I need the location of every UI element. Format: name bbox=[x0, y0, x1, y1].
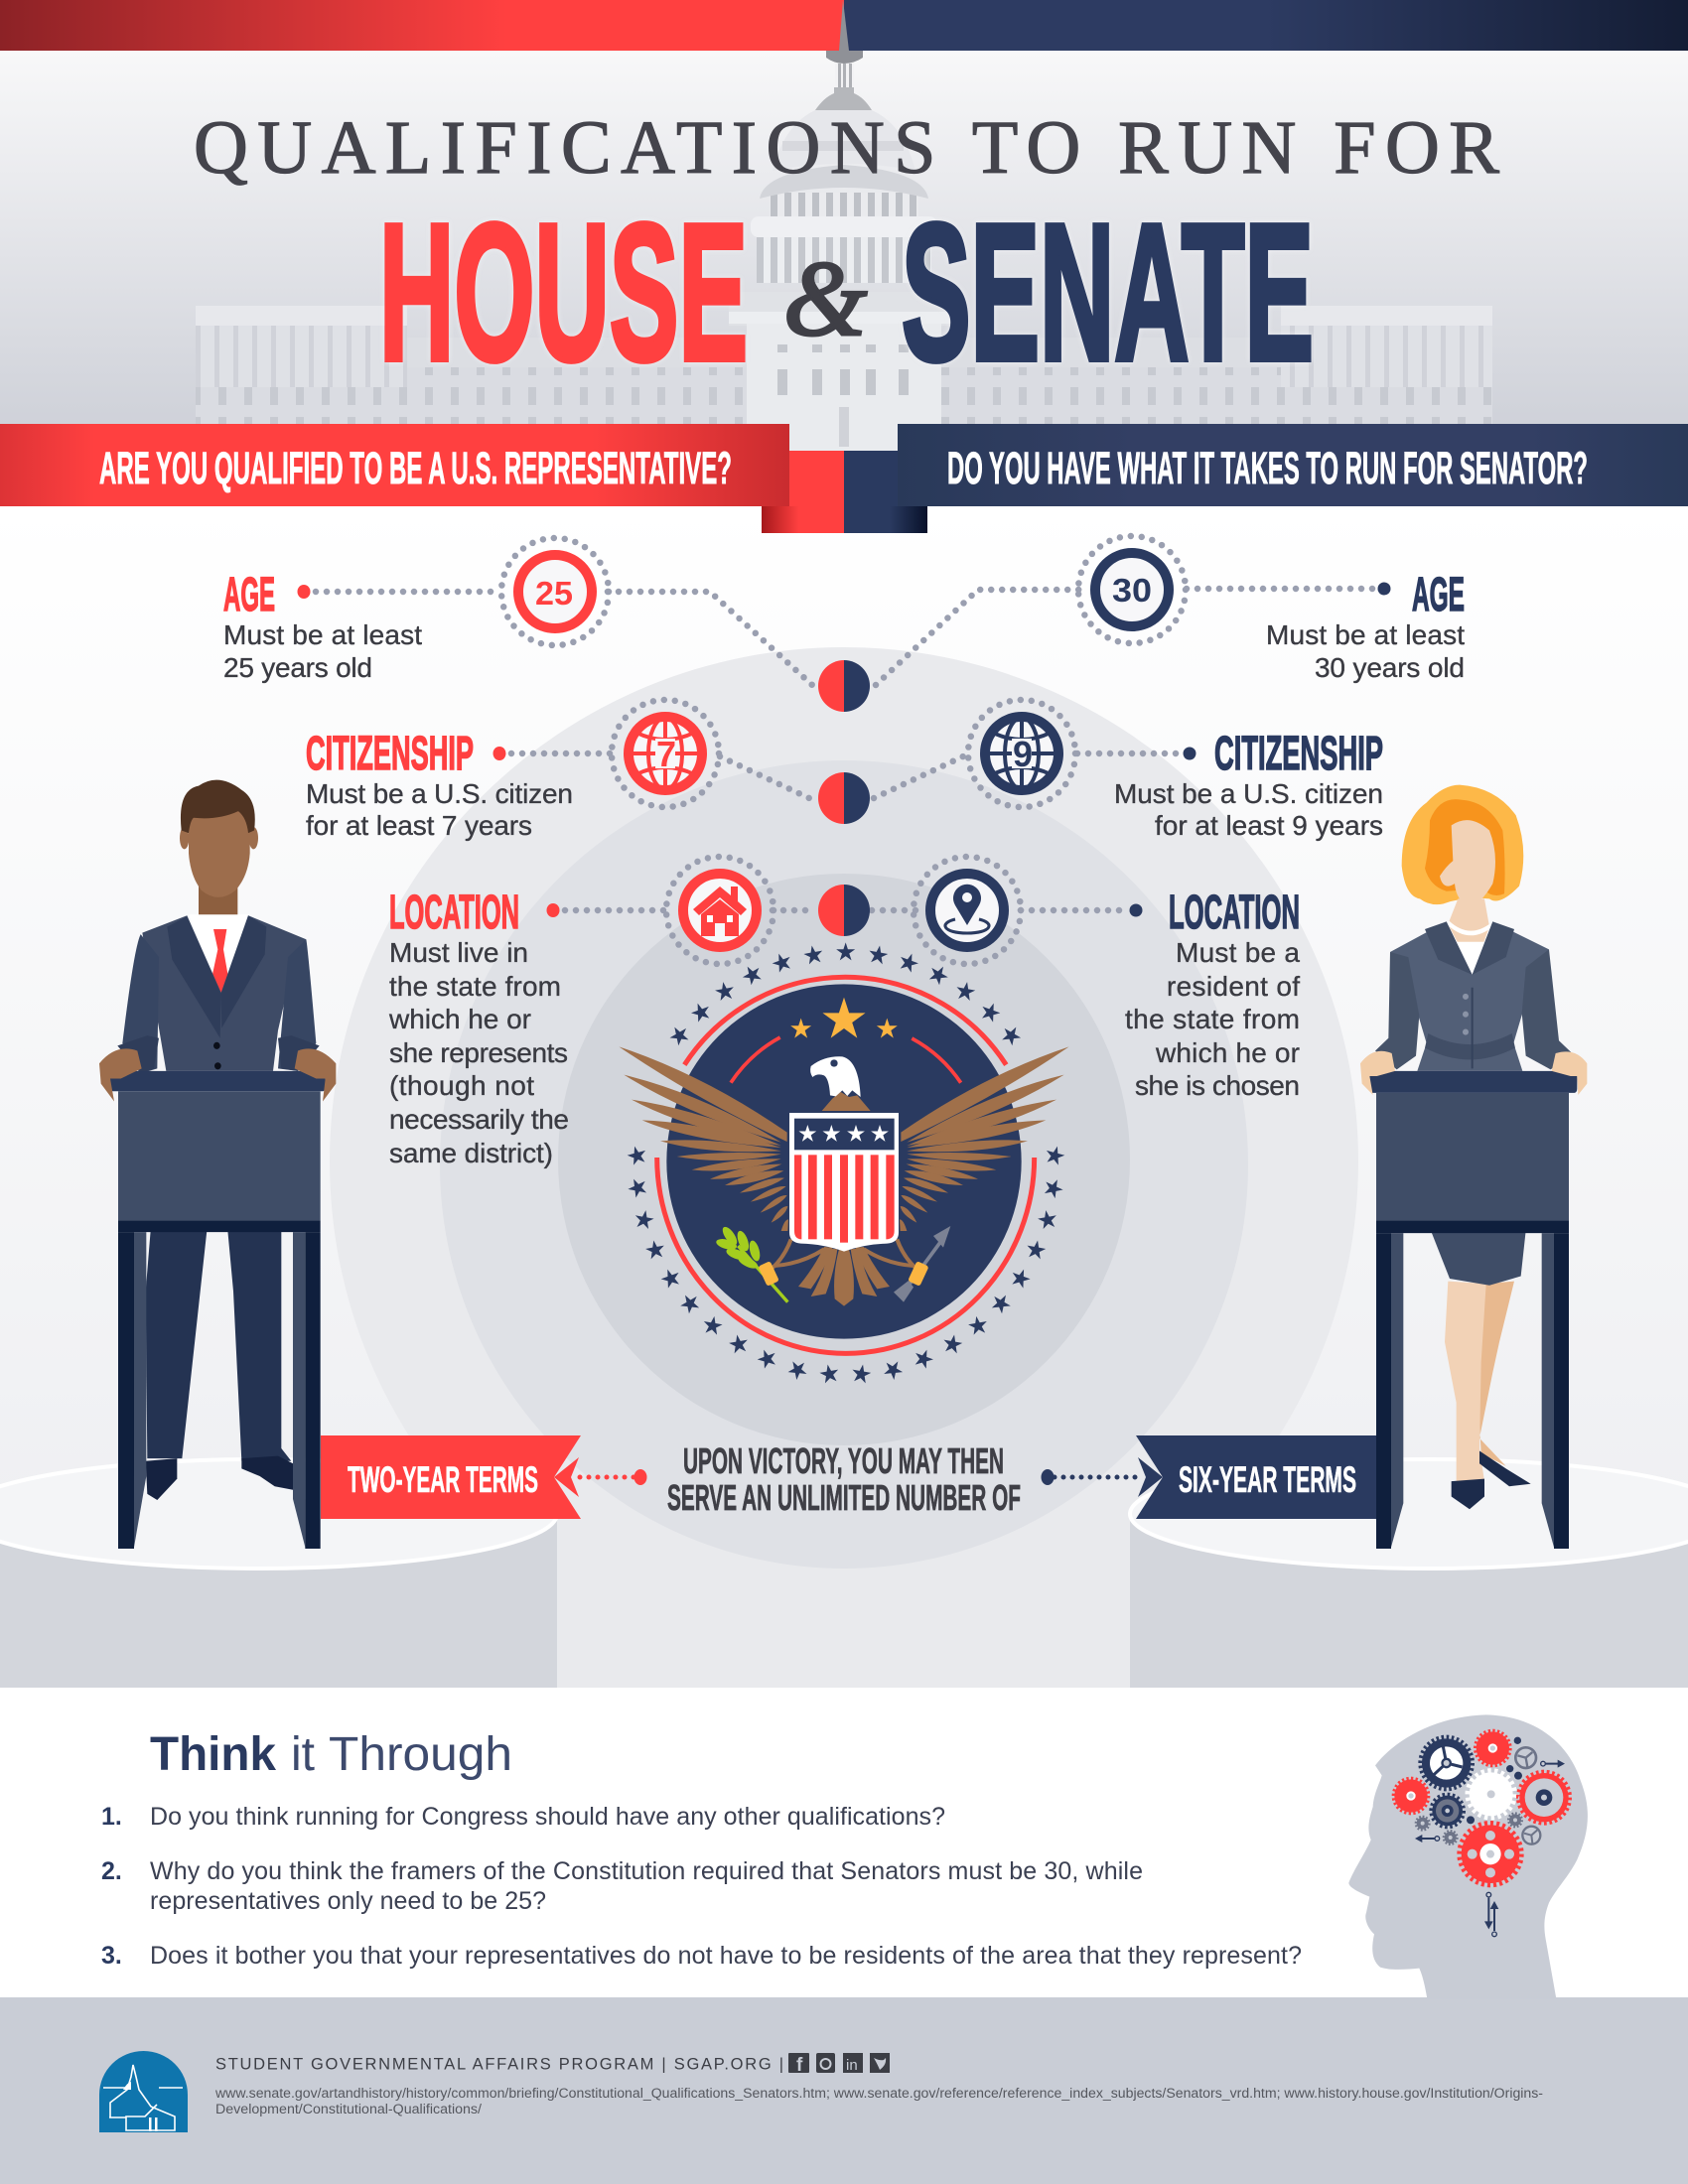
eagle neck and head bbox=[810, 1056, 871, 1111]
title: SENATE: SENATE bbox=[902, 184, 1314, 401]
main panel background bbox=[0, 506, 1688, 1688]
footer program line: STUDENT GOVERNMENTAL AFFAIRS PROGRAM | SGAP.ORG | bbox=[215, 2055, 783, 2073]
title: HOUSE: HOUSE bbox=[379, 184, 748, 401]
illustration: eagle seal bbox=[619, 942, 1069, 1384]
ribbon: two-year terms bbox=[321, 1435, 581, 1519]
centre ribbon fold bbox=[762, 451, 927, 533]
red gear bottom bbox=[1460, 1823, 1521, 1885]
red gear left bbox=[1393, 1778, 1429, 1814]
suit jacket bbox=[117, 914, 320, 1073]
heading: Think it Through: Through bbox=[329, 1728, 512, 1781]
text: House citizenship bbox=[306, 728, 573, 841]
text: House citizenship: Must be a U.S. citizen bbox=[306, 778, 573, 809]
talons bbox=[758, 1261, 929, 1287]
text: House citizenship: CITIZENSHIP bbox=[306, 728, 474, 780]
hands bbox=[99, 1048, 336, 1101]
text: House citizenship: for at least 7 years bbox=[306, 810, 532, 841]
question 2: Why do you think the framers of the Constitution required that Senators must be 30, while bbox=[150, 1857, 1143, 1885]
header background bbox=[0, 51, 1688, 506]
text: House location: which he or bbox=[388, 1004, 531, 1034]
half-and-half centre dots bbox=[818, 660, 870, 936]
ribbon: six-year terms: SIX-YEAR TERMS bbox=[1179, 1459, 1356, 1500]
arrow bbox=[894, 1226, 950, 1302]
illustration: male candidate at lectern bbox=[99, 780, 336, 1549]
footer band bbox=[0, 1997, 1688, 2184]
navy gear bbox=[1421, 1737, 1473, 1789]
illustration: female candidate at lectern bbox=[1360, 785, 1587, 1549]
text: Senate location bbox=[1125, 887, 1300, 1101]
badge: age 30 bbox=[1078, 536, 1186, 643]
question 2 bbox=[101, 1857, 1143, 1915]
social icons: f bbox=[796, 2055, 803, 2076]
text: Senate location: LOCATION bbox=[1169, 887, 1300, 939]
text: Senate citizenship: for at least 9 years bbox=[1155, 810, 1383, 841]
suit jacket bbox=[1375, 921, 1572, 1071]
eagle tail bbox=[798, 1247, 890, 1306]
heading: Think it Through bbox=[150, 1728, 512, 1781]
gold stars bbox=[790, 998, 898, 1038]
olive branch bbox=[715, 1225, 787, 1302]
trousers bbox=[146, 1231, 293, 1500]
badge: age 25: 25 bbox=[535, 575, 573, 612]
illustration: head with gears bbox=[1348, 1714, 1588, 1998]
text: House age: 25 years old bbox=[223, 652, 372, 683]
badge: age 25 bbox=[501, 538, 609, 645]
text: Senate age: Must be at least bbox=[1266, 619, 1465, 650]
question 3: 3. bbox=[101, 1942, 122, 1970]
banner: House question: ARE YOU QUALIFIED TO BE A U.S. REPRESENTATIVE? bbox=[99, 443, 732, 493]
portico bbox=[729, 292, 959, 453]
logo: SGAP bbox=[99, 2051, 188, 2132]
podiums bbox=[0, 1459, 1688, 1688]
shield bbox=[789, 1113, 899, 1252]
text: Senate citizenship: CITIZENSHIP bbox=[1214, 728, 1383, 780]
small grey gears bbox=[1416, 1814, 1522, 1844]
dome bbox=[751, 51, 937, 283]
legs bbox=[1431, 1231, 1531, 1509]
text: House location: the state from bbox=[389, 971, 561, 1002]
text: Senate location: resident of bbox=[1167, 971, 1300, 1002]
illustration: Capitol building bbox=[196, 51, 1492, 453]
text: Senate location: she is chosen bbox=[1135, 1070, 1300, 1101]
eagle wings bbox=[619, 1046, 1069, 1231]
small arrows bbox=[1415, 1760, 1565, 1937]
social icons: in bbox=[846, 2057, 858, 2074]
outer red arcs bbox=[657, 977, 1035, 1353]
badge: globe 7 bbox=[612, 700, 719, 807]
text: Senate age: AGE bbox=[1412, 569, 1465, 621]
badge: globe 7: 7 bbox=[656, 734, 676, 774]
question 1: Do you think running for Congress should have any other qualifications? bbox=[150, 1803, 945, 1831]
text: upon victory: UPON VICTORY, YOU MAY THEN bbox=[683, 1440, 1004, 1481]
navy gear small bbox=[1431, 1794, 1464, 1828]
text: House location bbox=[388, 887, 569, 1168]
title line: QUALIFICATIONS TO RUN FOR bbox=[194, 106, 1499, 190]
heading: Think it Through: it bbox=[291, 1728, 315, 1781]
ribbon: six-year terms bbox=[1136, 1435, 1376, 1519]
hands bbox=[1360, 1051, 1587, 1095]
text: Senate citizenship: Must be a U.S. citizen bbox=[1114, 778, 1383, 809]
text: House location: LOCATION bbox=[389, 887, 519, 939]
arrow: to two-year terms bbox=[554, 1457, 647, 1497]
connector dotted lines bbox=[316, 589, 1375, 910]
white section bbox=[0, 1688, 1688, 1997]
red gear right bbox=[1518, 1772, 1570, 1824]
text: House location: she represents bbox=[389, 1037, 568, 1068]
text: House age: Must be at least bbox=[223, 619, 422, 650]
social icons bbox=[788, 2053, 890, 2076]
concentric circles backdrop bbox=[330, 647, 1358, 1688]
white gear bbox=[1468, 1771, 1514, 1818]
red gear top bbox=[1476, 1730, 1510, 1766]
navy disc bbox=[666, 984, 1022, 1339]
question 3: Does it bother you that your representatives do not have to be residents of the area that they represent? bbox=[150, 1942, 1302, 1970]
question 2: 2. bbox=[101, 1857, 122, 1885]
badge: map pin bbox=[914, 857, 1021, 964]
banner: Senate question bbox=[898, 424, 1688, 506]
ribbon: two-year terms: TWO-YEAR TERMS bbox=[348, 1459, 538, 1500]
text: House location: necessarily the bbox=[389, 1104, 569, 1135]
inner red arcs bbox=[731, 1037, 961, 1083]
wings bbox=[196, 306, 1492, 452]
text: upon victory: SERVE AN UNLIMITED NUMBER OF bbox=[667, 1477, 1021, 1518]
text: upon victory bbox=[667, 1440, 1021, 1518]
head and hair bbox=[180, 780, 258, 919]
heading: Think it Through: Think bbox=[150, 1728, 276, 1781]
title: ampersand: & bbox=[783, 240, 867, 358]
text: Senate citizenship bbox=[1114, 728, 1383, 841]
text: Senate location: the state from bbox=[1125, 1004, 1300, 1034]
source URLs: www.senate.gov/artandhistory/history/common/briefing/Constitutional_Qualifications_Senators.htm; www.senate.gov/reference/reference_index_subjects/Senators_vrd.htm; www.history.house.gov/Institution/Origins- bbox=[214, 2086, 1543, 2101]
lectern bbox=[1369, 1071, 1577, 1549]
arrow: to six-year terms bbox=[1041, 1457, 1163, 1497]
endpoint dots bbox=[298, 582, 1390, 917]
head silhouette bbox=[1348, 1714, 1588, 1998]
top colour bar bbox=[0, 0, 1688, 51]
text: House age: AGE bbox=[223, 569, 275, 621]
text: Senate location: which he or bbox=[1155, 1037, 1300, 1068]
question 1: 1. bbox=[101, 1803, 122, 1831]
eagle legs bbox=[772, 1239, 916, 1269]
text: House location: Must live in bbox=[389, 937, 528, 968]
lectern bbox=[110, 1071, 326, 1549]
source URLs bbox=[214, 2086, 1543, 2116]
text: House age bbox=[223, 569, 422, 683]
badge: globe 9 bbox=[968, 700, 1075, 807]
navy dots bbox=[1467, 1737, 1522, 1824]
badge: age 30: 30 bbox=[1112, 572, 1152, 609]
text: Senate age bbox=[1266, 569, 1465, 683]
badge: globe 9: 9 bbox=[1013, 734, 1033, 774]
text: Senate age: 30 years old bbox=[1315, 652, 1465, 683]
text: House location: (though not bbox=[389, 1070, 534, 1101]
badge: house bbox=[666, 857, 774, 964]
source URLs: Development/Constitutional-Qualifications/ bbox=[215, 2102, 482, 2116]
question 2: representatives only need to be 25? bbox=[150, 1887, 546, 1915]
hair and head bbox=[1402, 785, 1523, 972]
banner: House question bbox=[0, 424, 789, 506]
text: Senate location: Must be a bbox=[1176, 937, 1300, 968]
ring of stars bbox=[625, 942, 1066, 1384]
grey wheels bbox=[1515, 1747, 1540, 1844]
text: House location: same district) bbox=[389, 1138, 553, 1168]
